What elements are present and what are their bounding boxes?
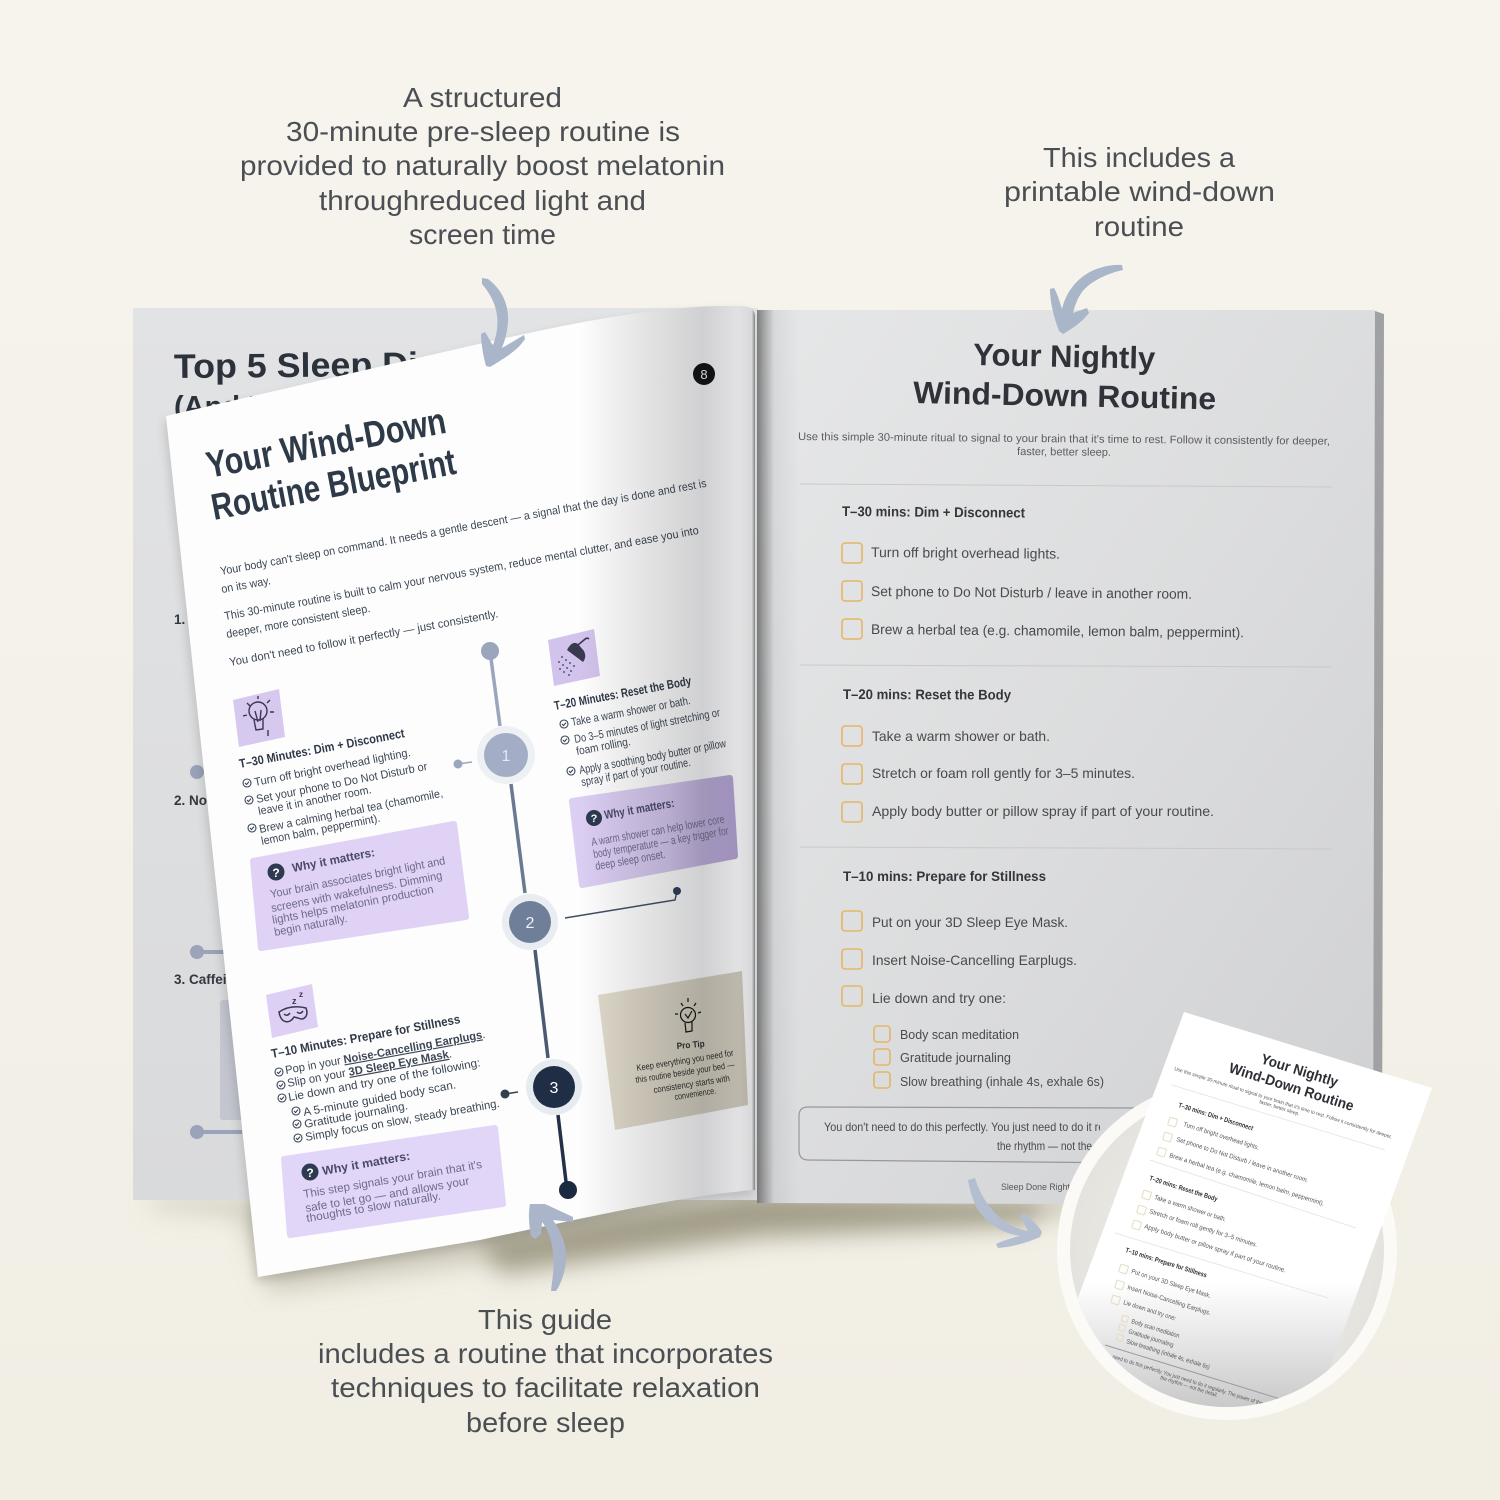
checklist: T-10: T–10 mins: Prepare for Stillness <box>843 868 1046 884</box>
bottom caption: techniques to facilitate relaxation <box>331 1372 760 1403</box>
checklist: T-20: T–20 mins: Reset the Body <box>843 686 1011 703</box>
icon: pro tip bulb <box>675 998 701 1032</box>
sheet dividers <box>1115 1085 1385 1298</box>
back page list items <box>174 612 227 987</box>
sheet section 3: Insert Noise-Cancelling Earplugs. <box>1126 1284 1212 1317</box>
callout: why it matters: Why it matters: <box>321 1149 411 1178</box>
callout: why it matters: A warm shower can help lower core <box>590 814 725 849</box>
step heading: T–30 Minutes: Dim + Disconnect <box>238 726 406 771</box>
step checklist: Slip on your 3D Sleep Eye Mask. <box>286 1048 453 1090</box>
page number: 8 <box>700 367 708 382</box>
pro tip card: Pro Tip <box>676 1039 706 1051</box>
intro paragraphs: deeper, more consistent sleep. <box>225 603 371 641</box>
step 2: T-20 <box>548 629 735 885</box>
note box: You don't need to do this perfectly. You just need to do it regularly. The power of this <box>824 1120 1224 1134</box>
step checklist: Lie down and try one of the following: <box>287 1057 481 1104</box>
sheet section 3: T–10 mins: Prepare for Stillness <box>1124 1247 1208 1280</box>
step checklist: Take a warm shower or bath. <box>570 695 692 729</box>
callout: why it matters: deep sleep onset. <box>594 849 666 873</box>
arrow: top-right <box>1050 265 1123 334</box>
step checklist: foam rolling. <box>575 736 632 758</box>
step checklist <box>275 1029 501 1144</box>
checklist: T-30: Brew a herbal tea (e.g. chamomile, lemon balm, peppermint). <box>871 621 1244 640</box>
pro tip card: consistency starts with <box>653 1073 730 1095</box>
step checklist: Gratitude journaling. <box>303 1100 409 1131</box>
checklist: T-10: Gratitude journaling <box>900 1051 1011 1065</box>
note box: the rhythm — not the detail. <box>997 1139 1122 1153</box>
icon: light bulb <box>233 689 285 747</box>
note box <box>798 1106 1135 1164</box>
page number <box>693 363 715 385</box>
step checklist: lemon balm, peppermint). <box>260 813 381 848</box>
step checklist: spray if part of your routine. <box>580 757 692 789</box>
intro paragraphs: You don't need to follow it perfectly — just consistently. <box>228 608 499 669</box>
sheet title: Your Nightly <box>1259 1052 1340 1091</box>
callout: why it matters: safe to let go — and allows your <box>304 1175 470 1215</box>
callout: why it matters: lights helps melatonin production <box>271 884 435 927</box>
dividers <box>800 484 1332 849</box>
connector 2 <box>565 887 681 918</box>
checklist: T-20: Stretch or foam roll gently for 3–5 minutes. <box>872 765 1135 781</box>
intro paragraphs: This 30-minute routine is built to calm your nervous system, reduce mental clutter, and ease you into <box>223 525 700 623</box>
top-left caption: screen time <box>409 219 556 250</box>
sheet section 1: Set phone to Do Not Disturb / leave in another room. <box>1175 1136 1309 1184</box>
top-right caption <box>1004 142 1275 242</box>
inset sheet <box>1078 1012 1432 1407</box>
intro paragraphs: on its way. <box>220 575 272 596</box>
bottom caption <box>318 1304 773 1438</box>
node 1: 1 <box>502 748 511 765</box>
checklist: T-30 <box>842 503 1244 640</box>
top-left caption: throughreduced light and <box>319 185 646 216</box>
callout: why it matters: screens with wakefulness. Dimming <box>270 870 443 915</box>
sheet title: Wind-Down Routine <box>1227 1061 1356 1115</box>
callout: why it matters <box>253 824 466 948</box>
arrow: bottom <box>529 1204 573 1291</box>
top-right caption: printable wind-down <box>1004 176 1275 207</box>
node 3: 3 <box>550 1080 559 1097</box>
curled page <box>164 306 755 1282</box>
checklist: T-20 <box>842 686 1214 822</box>
step checklist: Apply a soothing body butter or pillow <box>578 738 728 777</box>
step checklist: Set your phone to Do Not Disturb or <box>255 761 429 806</box>
sheet section 1: Brew a herbal tea (e.g. chamomile, lemon balm, peppermint). <box>1168 1152 1325 1208</box>
step heading: T–20 Minutes: Reset the Body <box>553 674 692 713</box>
back page title: Top 5 Sleep Dis <box>174 346 438 386</box>
blueprint title: Routine Blueprint <box>208 441 459 528</box>
blueprint title: Your Wind-Down <box>203 400 449 486</box>
checklist: T-20: Take a warm shower or bath. <box>872 728 1050 744</box>
timeline <box>454 642 681 1199</box>
node 3 <box>526 1059 582 1115</box>
checklist: T-30: Set phone to Do Not Disturb / leave in another room. <box>871 583 1192 602</box>
pro tip card: this routine beside your bed — <box>635 1059 735 1085</box>
checklist: T-10 <box>842 868 1104 1089</box>
top-left caption <box>240 82 725 250</box>
inset sheet: faster, better sleep. <box>1258 1099 1300 1118</box>
step checklist: Do 3–5 minutes of light stretching or <box>573 707 721 746</box>
step checklist <box>243 747 444 848</box>
top-right caption: This includes a <box>1043 142 1235 173</box>
spine shade <box>757 310 807 1203</box>
inset circle <box>1057 1080 1397 1420</box>
icon: sleep mask <box>266 984 318 1038</box>
back page dots <box>190 765 242 1139</box>
back page placeholder block <box>220 1000 260 1120</box>
callout: why it matters: Why it matters: <box>291 845 376 875</box>
step heading: T–10 Minutes: Prepare for Stillness <box>270 1012 461 1061</box>
callout: why it matters: ? <box>591 813 598 825</box>
sheet section 3 <box>1111 1247 1212 1371</box>
back page list items: 2. No <box>174 793 207 808</box>
page curl shading <box>166 306 755 1277</box>
checklist: T-10: Put on your 3D Sleep Eye Mask. <box>872 914 1068 930</box>
step 3: T-10 <box>266 984 503 1235</box>
callout: why it matters: thoughts to slow naturally. <box>305 1190 442 1225</box>
bottom caption: includes a routine that incorporates <box>318 1338 773 1369</box>
sheet section 1 <box>1157 1102 1325 1208</box>
back page list items: 1. <box>174 612 185 627</box>
top-left caption: provided to naturally boost melatonin <box>240 150 725 181</box>
callout: why it matters: Your brain associates bright light and <box>269 855 446 901</box>
right page <box>757 310 1384 1205</box>
sheet section 2: Take a warm shower or bath. <box>1153 1194 1227 1224</box>
arrow: top-left <box>481 278 525 367</box>
pro tip card: Keep everything you need for <box>636 1048 734 1073</box>
checklist: T-10: Lie down and try one: <box>872 990 1006 1006</box>
right page title: Wind-Down Routine <box>913 375 1217 416</box>
callout: why it matters <box>572 778 735 885</box>
top-left caption: 30-minute pre-sleep routine is <box>286 116 680 147</box>
top-left caption: A structured <box>403 82 562 113</box>
right page title: Your Nightly <box>973 337 1156 376</box>
checklist: T-10: Body scan meditation <box>900 1028 1019 1042</box>
callout: why it matters: Why it matters: <box>603 796 675 822</box>
icon: sleep mask: z <box>292 996 297 1006</box>
blueprint title <box>203 400 459 528</box>
right page intro <box>798 431 1330 459</box>
intro paragraphs: Your body can't sleep on command. It needs a gentle descent — a signal that the day is done and rest is <box>219 478 708 578</box>
step checklist: Simply focus on slow, steady breathing. <box>304 1098 501 1144</box>
sheet section 3: Lie down and try one: <box>1122 1299 1177 1322</box>
icon: shower <box>548 629 600 686</box>
step checklist: Brew a calming herbal tea (chamomile, <box>258 788 444 836</box>
step checklist: Pop in your Noise-Cancelling Earplugs. <box>284 1029 486 1077</box>
sheet section 3: Slow breathing (inhale 4s, exhale 6s) <box>1125 1338 1210 1371</box>
back page list items: 3. Caffei <box>174 972 227 987</box>
sheet note <box>1104 1344 1279 1404</box>
node 2 <box>502 894 558 950</box>
bottom caption: This guide <box>478 1304 612 1335</box>
callout: why it matters: This step signals your brain that it's <box>302 1159 483 1201</box>
sheet section 3: Put on your 3D Sleep Eye Mask. <box>1130 1268 1212 1300</box>
node 1 <box>477 726 535 784</box>
step checklist: leave it in another room. <box>257 784 372 818</box>
callout: why it matters: ? <box>306 1166 314 1180</box>
checklist: T-30: T–30 mins: Dim + Disconnect <box>842 503 1025 521</box>
checklist: T-30: Turn off bright overhead lights. <box>871 544 1060 562</box>
checklist: T-10: Insert Noise-Cancelling Earplugs. <box>872 952 1077 968</box>
top-right caption: routine <box>1094 211 1184 242</box>
sheet section 2: Apply body butter or pillow spray if part of your routine. <box>1143 1223 1287 1274</box>
page footer: Sleep Done Right · Guide <box>1001 1182 1101 1192</box>
back left page <box>133 308 758 1200</box>
callout: why it matters: body temperature — a key trigger for <box>592 825 730 861</box>
step checklist <box>560 695 728 789</box>
sheet section 2 <box>1132 1175 1287 1274</box>
book shadow <box>150 1190 1378 1292</box>
step checklist: Turn off bright overhead lighting. <box>253 747 412 789</box>
sheet section 1: T–30 mins: Dim + Disconnect <box>1177 1102 1254 1133</box>
right page title <box>913 337 1217 416</box>
callout: why it matters: ? <box>272 866 280 880</box>
sheet section 2: T–20 mins: Reset the Body <box>1148 1175 1218 1203</box>
right page intro: Use this simple 30-minute ritual to signal to your brain that it's time to rest. Follow it consistently for deeper, <box>798 431 1330 448</box>
arrow: to inset <box>968 1178 1042 1248</box>
checklist: T-20: Apply body butter or pillow spray if part of your routine. <box>872 803 1214 819</box>
icon: sleep mask: z <box>299 990 303 999</box>
bottom caption: before sleep <box>466 1407 625 1438</box>
pro tip card: convenience. <box>674 1086 717 1102</box>
node 2: 2 <box>526 915 535 932</box>
pro tip card <box>598 971 748 1130</box>
callout: why it matters <box>284 1128 503 1235</box>
connector 1 <box>454 760 472 768</box>
callout: why it matters: begin naturally. <box>273 913 348 939</box>
sheet note: need to do this perfectly. You just need to do it regularly. The power of this <box>1111 1354 1264 1407</box>
back page subtitle: (And H <box>174 391 269 423</box>
intro paragraphs <box>219 478 708 669</box>
sheet section 3: Gratitude journaling <box>1127 1328 1175 1349</box>
sheet section 1: Turn off bright overhead lights. <box>1182 1121 1260 1152</box>
sheet section 3: Body scan meditation <box>1130 1318 1180 1340</box>
sheet section 2: Stretch or foam roll gently for 3–5 minutes. <box>1148 1208 1258 1249</box>
sheet intro: Use this simple 30-minute ritual to signal to your brain that it's time to rest. Follow it consistently for deeper, <box>1173 1066 1393 1140</box>
sheet note: the rhythm — not the detail. <box>1159 1375 1219 1399</box>
step 1: T-30 <box>233 689 466 948</box>
right page intro: faster, better sleep. <box>1017 446 1111 459</box>
checklist: T-10: Slow breathing (inhale 4s, exhale 6s) <box>900 1075 1104 1089</box>
connector 3 <box>500 1090 518 1098</box>
step checklist: A 5-minute guided body scan. <box>302 1079 457 1119</box>
